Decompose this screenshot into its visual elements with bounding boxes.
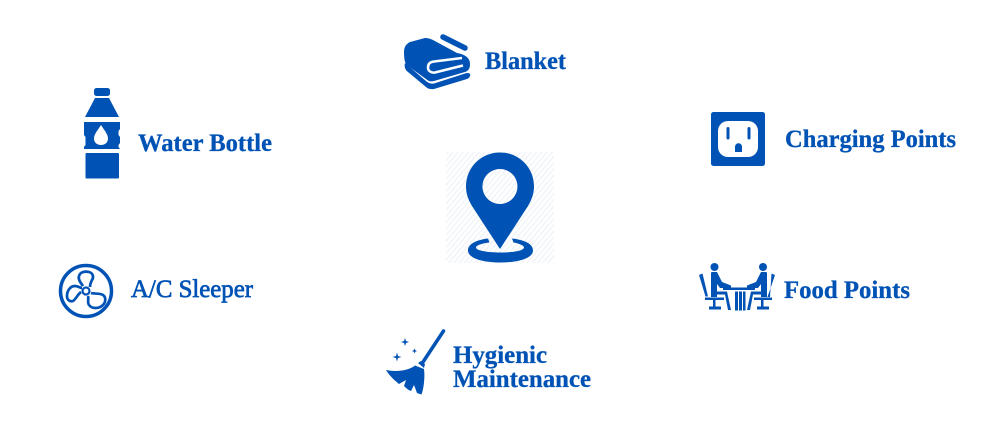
item: a/c sleeper	[60, 266, 254, 316]
item: hygienic maintenance	[386, 331, 591, 394]
item: water bottle	[84, 88, 272, 178]
label: charging points: Charging Points	[785, 126, 956, 153]
icon: blanket	[404, 37, 470, 89]
label: hygienic maintenance	[453, 342, 591, 393]
label: blanket: Blanket	[485, 48, 567, 75]
item: charging points	[711, 112, 956, 166]
label: hygienic maintenance: Hygienic	[453, 342, 547, 369]
central location pin icon	[446, 152, 554, 263]
icon: water bottle	[84, 88, 120, 178]
label: water bottle: Water Bottle	[138, 130, 272, 157]
label: a/c sleeper: A/C Sleeper	[131, 276, 254, 303]
icon: power outlet	[711, 112, 765, 166]
item: blanket	[404, 37, 567, 89]
icon: people at table	[699, 263, 775, 310]
item: food points	[699, 263, 910, 310]
icon: fan	[60, 266, 112, 316]
label: hygienic maintenance: Maintenance	[453, 366, 591, 393]
icon: broom	[386, 331, 444, 394]
label: food points: Food Points	[784, 277, 910, 304]
